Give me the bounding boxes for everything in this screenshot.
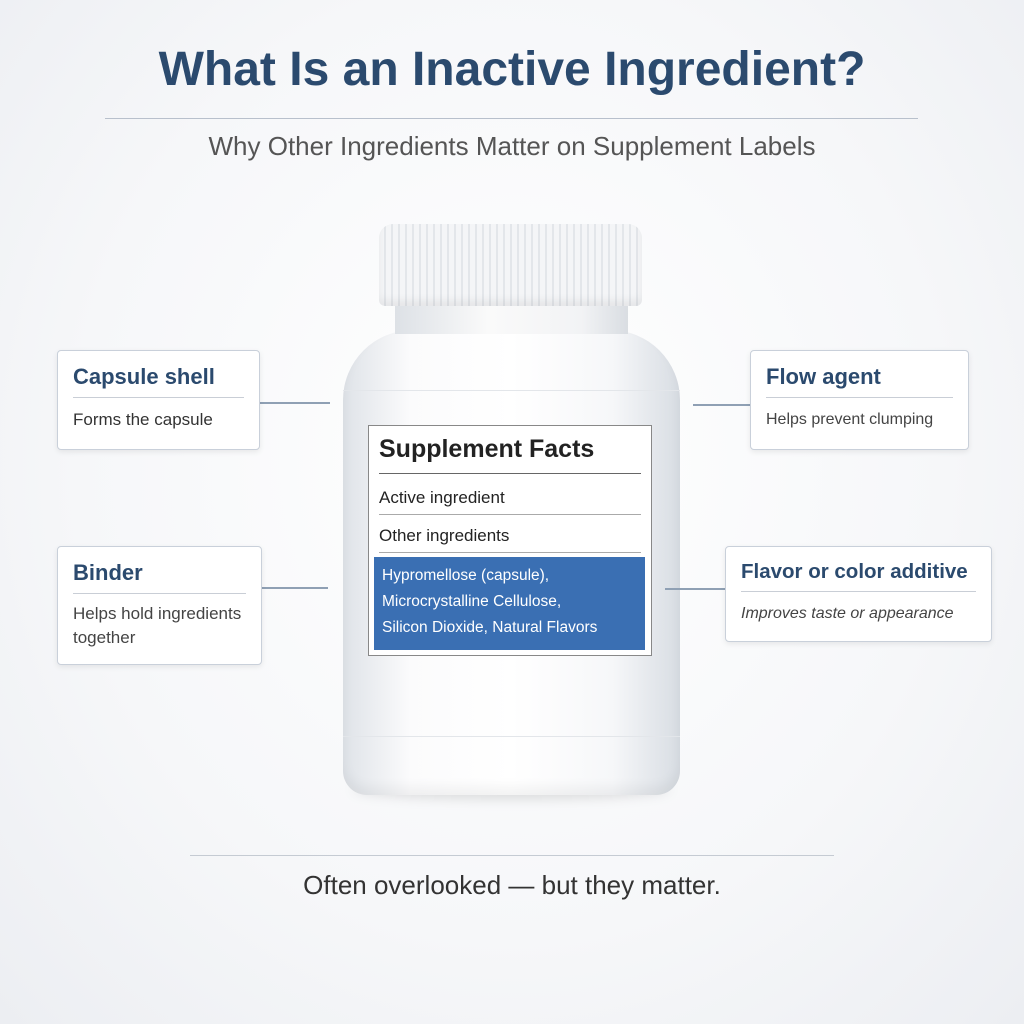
- title: What Is an Inactive Ingredient?: [159, 43, 865, 96]
- bottom divider: [190, 855, 834, 856]
- callout: flavor or color additive: Flavor or color additive: [741, 560, 968, 583]
- callout: binder: Helps hold ingredients: [73, 604, 241, 623]
- callout: capsule shell: Capsule shell: [73, 364, 215, 389]
- supplement facts label: [368, 425, 652, 656]
- neck: [395, 304, 628, 334]
- callout: capsule shell: Forms the capsule: [73, 410, 213, 429]
- label band: [343, 390, 680, 737]
- callout: flow agent: Helps prevent clumping: [766, 411, 933, 428]
- callout: binder: Binder: [73, 560, 143, 585]
- bottle: [343, 224, 680, 802]
- subtitle: Why Other Ingredients Matter on Supplement Labels: [208, 131, 816, 161]
- shadow: [353, 779, 670, 799]
- callout: flow agent: Flow agent: [766, 364, 881, 389]
- callout: binder: together: [73, 628, 135, 647]
- supplement facts label: Supplement Facts: [379, 435, 594, 463]
- connectors: [259, 402, 330, 404]
- cap: [379, 224, 642, 306]
- supplement facts label: Active ingredient: [379, 488, 505, 507]
- callout: flavor or color additive: Improves taste or appearance: [741, 605, 954, 622]
- callout: binder: [57, 546, 262, 665]
- callout: capsule shell: [57, 350, 260, 450]
- tagline: Often overlooked — but they matter.: [303, 870, 721, 900]
- blue highlight: Hypromellose (capsule),: [382, 567, 549, 584]
- body: [343, 330, 680, 795]
- blue highlight: [374, 557, 645, 650]
- blue highlight: Silicon Dioxide, Natural Flavors: [382, 619, 597, 636]
- blue highlight: Microcrystalline Cellulose,: [382, 593, 561, 610]
- supplement facts label: Other ingredients: [379, 526, 509, 545]
- callout: flavor or color additive: [725, 546, 992, 642]
- callout: flow agent: [750, 350, 969, 450]
